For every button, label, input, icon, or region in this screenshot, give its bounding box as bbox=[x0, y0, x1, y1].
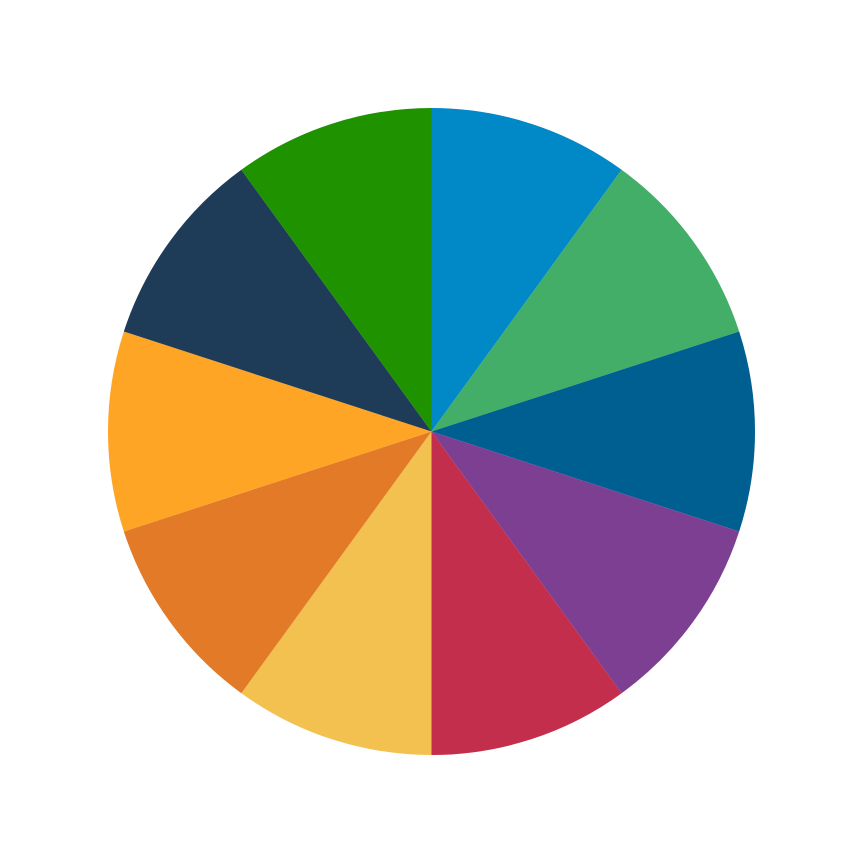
slice: blue bbox=[432, 108, 622, 432]
slice: purple bbox=[432, 432, 739, 693]
slice: yellow bbox=[241, 432, 432, 755]
slice: amber bbox=[108, 332, 432, 531]
slice: orange bbox=[124, 432, 431, 693]
slice: dark blue bbox=[432, 332, 755, 531]
slice: navy bbox=[124, 170, 431, 432]
slice: green bbox=[432, 170, 739, 432]
slice: crimson bbox=[432, 432, 622, 755]
slice: dark green bbox=[241, 108, 432, 432]
